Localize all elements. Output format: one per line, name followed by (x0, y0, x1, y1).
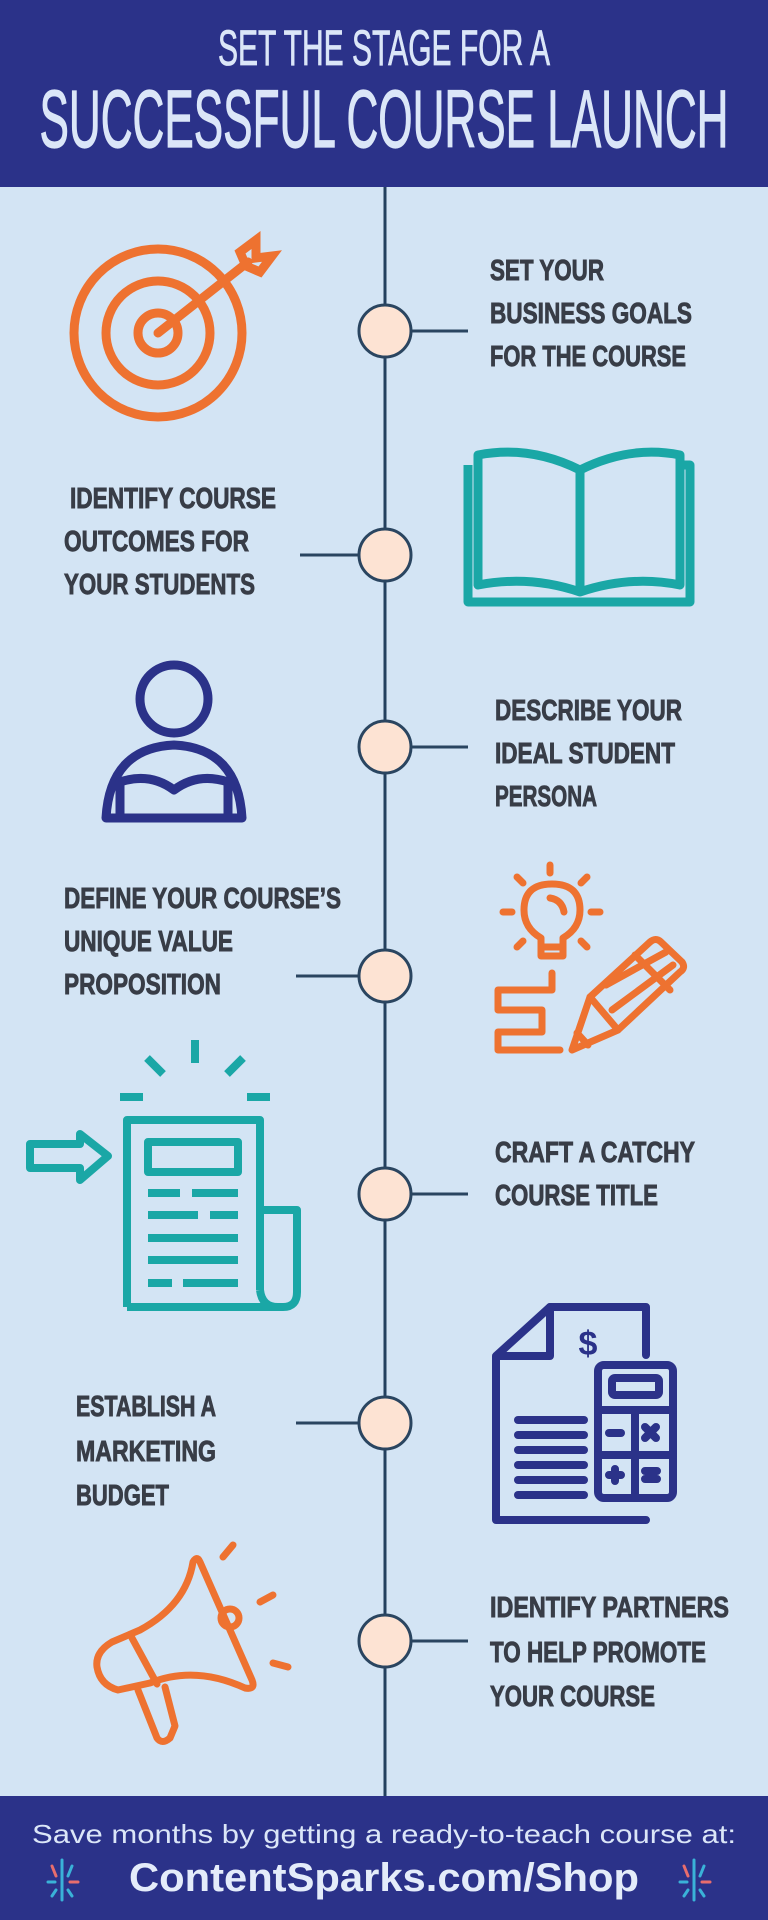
icon: target (74, 240, 272, 417)
icon: lightbulb and pencil (498, 865, 684, 1050)
icon: invoice and calculator (496, 1307, 673, 1520)
step 3 text: IDEAL STUDENT (495, 738, 675, 770)
step 5 text: CRAFT A CATCHY (495, 1137, 695, 1169)
step 5 text: COURSE TITLE (495, 1180, 658, 1212)
step 2 text: YOUR STUDENTS (64, 569, 255, 601)
footer line 1: Save months by getting a ready-to-teach course at: (32, 1819, 736, 1849)
step 3 text: PERSONA (495, 781, 597, 813)
step 4 text: UNIQUE VALUE (64, 926, 233, 958)
connectors and circles (296, 305, 468, 1667)
footer (0, 1796, 768, 1920)
step 6 text: BUDGET (76, 1480, 169, 1512)
icon: sparks left (48, 1860, 78, 1900)
step 1 text: FOR THE COURSE (490, 341, 686, 373)
icon: invoice and calculator: $ (579, 1325, 598, 1363)
icon: sparks right (680, 1860, 710, 1900)
step 4 text: PROPOSITION (64, 969, 221, 1001)
header (0, 0, 768, 187)
footer line 2: ContentSparks.com/Shop (129, 1856, 639, 1900)
step 7 text: YOUR COURSE (490, 1681, 655, 1713)
step 7 text: TO HELP PROMOTE (490, 1637, 706, 1669)
title line 1: SET THE STAGE FOR A (218, 20, 550, 76)
icon: book (468, 452, 690, 602)
step 1 text: SET YOUR (490, 255, 604, 287)
timeline line (384, 187, 386, 1796)
icon: person reading (106, 665, 242, 818)
icon: newspaper with arrow (30, 1040, 297, 1307)
step 2 text: IDENTIFY COURSE (70, 483, 276, 515)
step 1 text: BUSINESS GOALS (490, 298, 692, 330)
step 2 text: OUTCOMES FOR (64, 526, 249, 558)
step 6 text: MARKETING (76, 1436, 216, 1468)
icon: megaphone (97, 1545, 288, 1742)
step 6 text: ESTABLISH A (76, 1391, 216, 1423)
step 4 text: DEFINE YOUR COURSE’S (64, 883, 341, 915)
step 3 text: DESCRIBE YOUR (495, 695, 682, 727)
